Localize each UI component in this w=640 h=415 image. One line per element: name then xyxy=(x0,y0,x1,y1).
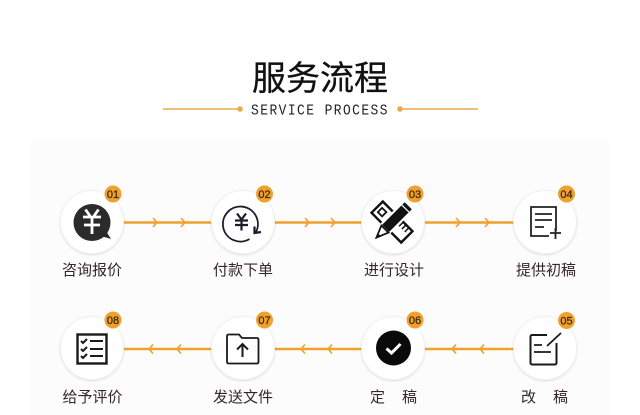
icon: yuan refresh xyxy=(223,207,261,242)
arrow: step 1 to 2 xyxy=(123,218,212,227)
icon: document plus xyxy=(531,207,561,239)
icon: checklist xyxy=(78,334,106,364)
step 02 xyxy=(212,186,274,279)
subtitle: SERVICE PROCESS: SERVICE PROCESS xyxy=(251,103,389,120)
badge 06: 06 xyxy=(409,315,421,327)
label: 提供初稿 xyxy=(516,262,576,279)
step 06 xyxy=(362,312,424,406)
label: 定 xyxy=(370,389,385,406)
label: 稿 xyxy=(402,389,417,406)
badge 07: 07 xyxy=(258,315,271,327)
arrow: step 5 to 6 xyxy=(424,344,514,354)
arrow: step 6 to 7 xyxy=(274,344,362,354)
title divider left xyxy=(163,106,243,112)
label: 咨询报价 xyxy=(62,262,122,279)
badge 01: 01 xyxy=(107,189,119,201)
arrow: step 2 to 3 xyxy=(274,218,362,227)
icon: folder upload xyxy=(227,334,258,364)
label: 进行设计 xyxy=(364,262,424,279)
icon: yuan speech bubble xyxy=(74,204,111,241)
step 01 xyxy=(60,186,124,279)
label: 稿 xyxy=(553,389,568,406)
title: 服务流程 xyxy=(252,60,388,98)
step 04 xyxy=(514,186,576,279)
badge 08: 08 xyxy=(107,315,119,327)
step 08 xyxy=(60,312,124,406)
icon: edit note xyxy=(530,333,561,364)
label: 改 xyxy=(521,389,536,406)
badge 05: 05 xyxy=(560,316,573,328)
arrow: step 7 to 8 xyxy=(123,344,212,354)
step 07 xyxy=(212,312,274,406)
badge 03: 03 xyxy=(409,189,421,201)
label: 给予评价 xyxy=(62,389,123,406)
icon: check circle xyxy=(376,330,411,366)
badge 04: 04 xyxy=(560,189,573,201)
arrow: step 3 to 4 xyxy=(424,218,514,227)
step 03 xyxy=(362,186,424,279)
label: 发送文件 xyxy=(213,389,273,406)
icon: pencil and ruler xyxy=(371,199,415,243)
label: 付款下单 xyxy=(213,262,273,279)
badge 02: 02 xyxy=(258,189,271,201)
step 05 xyxy=(514,312,576,406)
title divider right xyxy=(397,106,478,112)
